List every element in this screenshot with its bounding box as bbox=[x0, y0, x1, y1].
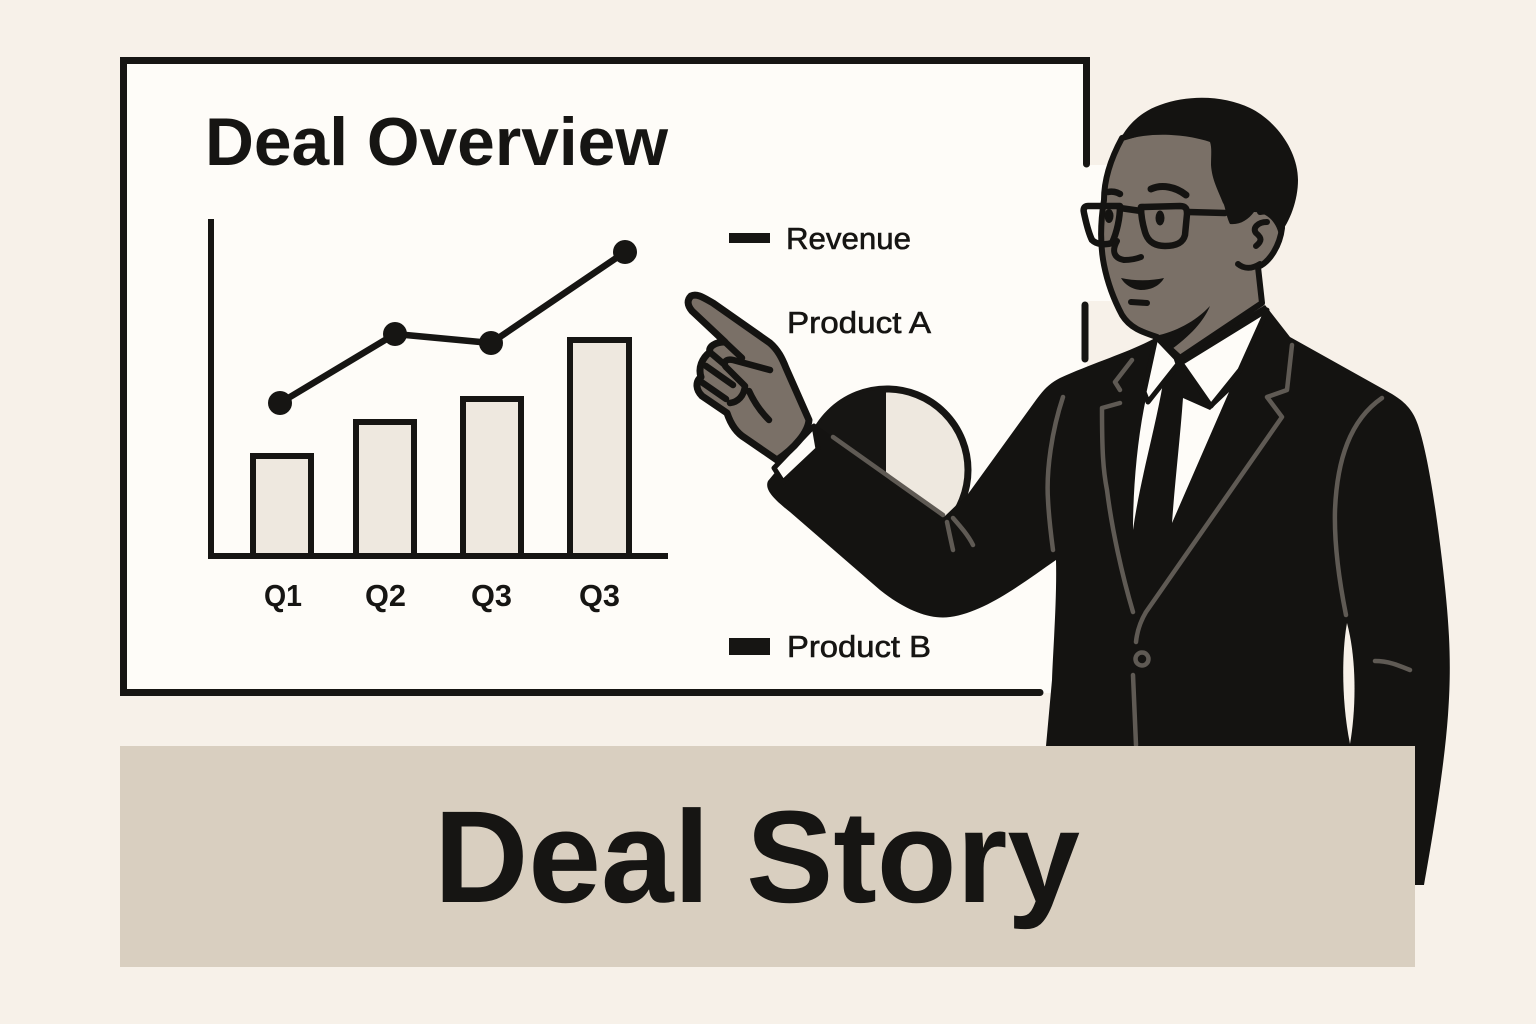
axis labels: Q2 bbox=[365, 578, 406, 613]
icon: pointing hand bbox=[688, 295, 809, 460]
axis labels bbox=[264, 578, 620, 613]
chart: quarterly bars and trend line bbox=[211, 219, 668, 613]
bar: Q3 second bbox=[570, 340, 629, 556]
trend line bbox=[268, 240, 637, 415]
legend: Product A: Product A bbox=[787, 305, 931, 340]
bar: Q3 bbox=[463, 399, 521, 556]
glasses bbox=[1084, 206, 1225, 246]
collar bbox=[1144, 310, 1267, 406]
legend: Product B: Product B bbox=[787, 629, 931, 664]
axis labels: Q1 bbox=[264, 578, 302, 613]
shirt right panel bbox=[1172, 392, 1229, 523]
axis labels: Q3 bbox=[579, 578, 620, 613]
legend: Revenue bbox=[729, 221, 911, 256]
shirt cuff bbox=[774, 426, 818, 482]
figure: presenter bbox=[767, 305, 1450, 885]
legend: Product B bbox=[729, 629, 931, 664]
mouth bbox=[1121, 278, 1164, 290]
title: Deal Story: Deal Story bbox=[434, 783, 1080, 930]
axis labels: Q3 bbox=[471, 578, 512, 613]
jaw shadow bbox=[1155, 306, 1210, 349]
face bbox=[1101, 125, 1282, 358]
head bbox=[1084, 98, 1298, 358]
title banner bbox=[120, 746, 1415, 967]
facial lines bbox=[1108, 187, 1267, 303]
jacket seams bbox=[833, 345, 1410, 745]
eyes bbox=[1104, 209, 1164, 226]
heading: Deal Overview: Deal Overview bbox=[205, 104, 669, 180]
hair bbox=[1119, 98, 1298, 235]
arm gap bbox=[1343, 623, 1355, 744]
legend: Revenue: Revenue bbox=[786, 221, 911, 256]
bar: Q2 bbox=[356, 422, 414, 556]
bar: Q1 bbox=[253, 456, 311, 556]
shirt bbox=[1133, 383, 1163, 530]
chart axes bbox=[211, 219, 668, 556]
jacket bbox=[767, 305, 1450, 885]
panel: presentation screen bbox=[123, 60, 1111, 693]
pie chart bbox=[806, 389, 968, 551]
